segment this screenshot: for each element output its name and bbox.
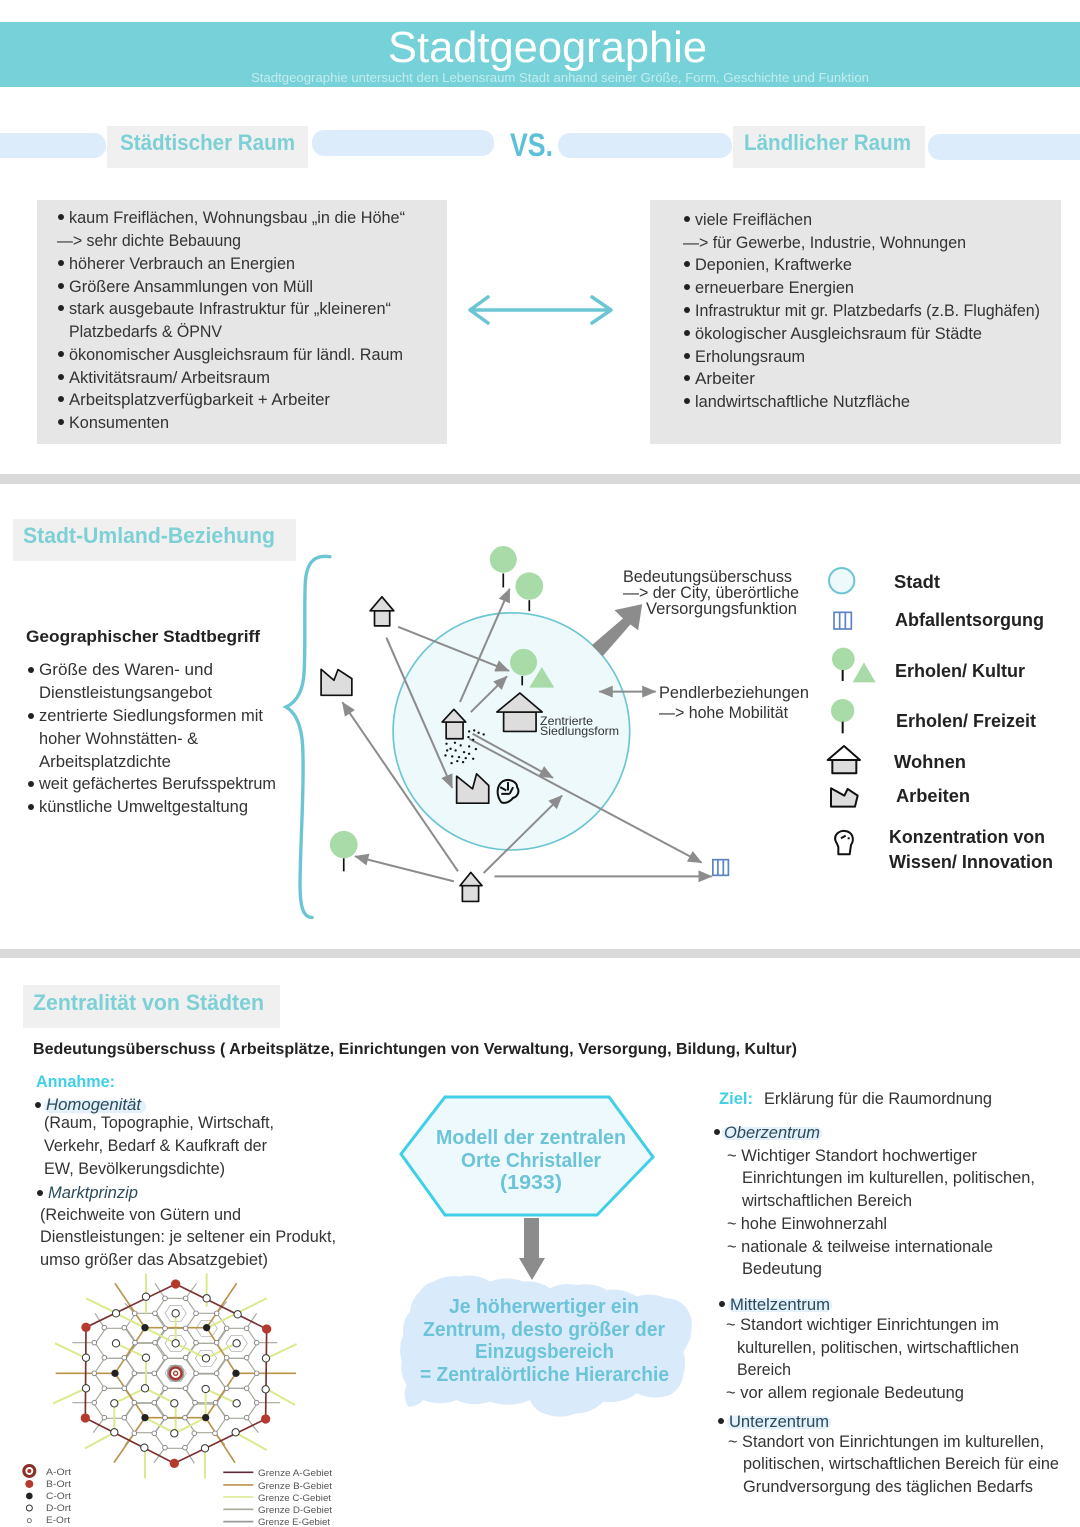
icon: tree lower left bbox=[330, 831, 358, 871]
text block: Geographischer Stadtbegriff: Arbeitsplatzdichte bbox=[39, 753, 171, 771]
heading: Ländlicher Raum: Ländlicher Raum bbox=[744, 130, 911, 155]
cloud: Zentralörtliche Hierarchie: Zentrum, desto größer der bbox=[423, 1319, 665, 1341]
legend: Erholen/ Kultur bbox=[895, 661, 1025, 681]
text block: Oberzentrum: Bedeutung bbox=[742, 1260, 822, 1278]
panel: städtischer Raum: Konsumenten bbox=[69, 414, 169, 432]
text block: Mittelzentrum bbox=[719, 1296, 1019, 1402]
text block: Geographischer Stadtbegriff: künstliche Umweltgestaltung bbox=[39, 798, 248, 816]
heading: Stadt-Umland-Beziehung: Stadt-Umland-Beziehung bbox=[23, 523, 275, 548]
subheading: Bedeutungsüberschuss: Bedeutungsüberschuss ( Arbeitsplätze, Einrichtungen von Verwaltung, Versorgung, Bildung, Kultur) bbox=[33, 1041, 797, 1058]
text block: Unterzentrum: ~ Standort von Einrichtungen im kulturellen, bbox=[728, 1433, 1044, 1451]
text block: Oberzentrum: ~ hohe Einwohnerzahl bbox=[727, 1215, 887, 1233]
legend labels: A-Ort bbox=[46, 1467, 71, 1478]
legend symbols: places bbox=[22, 1464, 36, 1523]
icon: house centre bbox=[442, 709, 466, 739]
legend: Abfallentsorgung bbox=[895, 610, 1044, 630]
text block: Mittelzentrum: Mittelzentrum bbox=[730, 1296, 830, 1314]
panel: städtischer Raum bbox=[37, 200, 447, 444]
hexagon: Modell der zentralen Orte: Orte Christaller bbox=[461, 1150, 601, 1172]
A-area boundary bbox=[85, 1284, 267, 1463]
panel: ländlicher Raum: erneuerbare Energien bbox=[695, 279, 854, 297]
panel: ländlicher Raum: Arbeiter bbox=[695, 370, 756, 388]
legend labels: E-Ort bbox=[46, 1515, 70, 1526]
panel: ländlicher Raum bbox=[650, 200, 1061, 444]
heading: Städtischer Raum bbox=[107, 126, 308, 168]
text block: Geographischer Stadtbegriff: Größe des Waren- und bbox=[39, 661, 213, 679]
legend symbols: borders bbox=[223, 1472, 253, 1522]
legend labels bbox=[46, 1467, 332, 1527]
B places bbox=[81, 1279, 271, 1468]
label: Bedeutungsüberschuss: Bedeutungsüberschuss bbox=[623, 568, 792, 586]
label: Zentrierte Siedlungsform bbox=[540, 714, 619, 738]
text block: Geographischer Stadtbegriff bbox=[26, 627, 276, 816]
text block: Geographischer Stadtbegriff: hoher Wohnstätten- & bbox=[39, 730, 198, 748]
text block: Mittelzentrum: ~ Standort wichtiger Einrichtungen im bbox=[726, 1316, 999, 1334]
text block: Oberzentrum: wirtschaftlichen Bereich bbox=[741, 1192, 912, 1210]
text block: Unterzentrum bbox=[718, 1413, 1059, 1496]
legend: Arbeiten bbox=[896, 786, 970, 806]
title: Stadtgeographie bbox=[388, 23, 707, 72]
panel: städtischer Raum: Platzbedarfs & ÖPNV bbox=[69, 323, 222, 341]
legend bbox=[828, 568, 1053, 872]
panel: städtischer Raum: höherer Verbrauch an Energien bbox=[69, 255, 295, 273]
legend labels: Grenze D-Gebiet bbox=[258, 1505, 332, 1516]
icon: factory left bbox=[321, 669, 352, 695]
cloud: Zentralörtliche Hierarchie bbox=[400, 1276, 692, 1417]
heading: Stadt-Umland-Beziehung bbox=[13, 519, 296, 561]
text block: Annahme: Dienstleistungen: je seltener ein Produkt, bbox=[40, 1228, 336, 1246]
panel: ländlicher Raum: Infrastruktur mit gr. Platzbedarfs (z.B. Flughäfen) bbox=[695, 302, 1040, 320]
hexagon: Modell der zentralen Orte: (1933) bbox=[500, 1172, 562, 1194]
text block: Oberzentrum: Oberzentrum bbox=[724, 1124, 820, 1142]
icon: factory in city bbox=[457, 774, 489, 803]
arrow: Bedeutungsüberschuss bbox=[592, 604, 642, 656]
icon: tree and triangle in city bbox=[510, 649, 554, 688]
header banner bbox=[0, 22, 1080, 87]
label: Pendlerbeziehungen: —> hohe Mobilität bbox=[659, 704, 788, 722]
D places bbox=[82, 1293, 270, 1452]
icon: house top left bbox=[370, 597, 394, 626]
legend: Erholen/ Freizeit bbox=[896, 711, 1036, 731]
city circle bbox=[393, 613, 630, 850]
A place bbox=[167, 1365, 184, 1382]
legend labels: C-Ort bbox=[46, 1491, 71, 1502]
label: Bedeutungsüberschuss: —> der City, überörtliche bbox=[623, 584, 799, 602]
label: Pendlerbeziehungen: Pendlerbeziehungen bbox=[659, 684, 809, 702]
text block: Ziel: Ziel: bbox=[719, 1090, 753, 1108]
text block: Annahme: umso größer das Absatzgebiet) bbox=[40, 1251, 268, 1269]
arrow: down bbox=[519, 1218, 545, 1280]
legend labels: B-Ort bbox=[46, 1479, 71, 1490]
icon: Stadt bbox=[829, 568, 854, 593]
legend: Wissen/ Innovation bbox=[889, 852, 1053, 872]
legend labels: Grenze A-Gebiet bbox=[258, 1468, 332, 1479]
icon: brain bbox=[498, 780, 518, 803]
text block: Annahme: EW, Bevölkerungsdichte) bbox=[44, 1160, 225, 1178]
arrows bbox=[342, 589, 712, 881]
legend: Stadt bbox=[894, 572, 940, 592]
text block: Annahme: Annahme: bbox=[36, 1073, 115, 1091]
text block: Annahme: Verkehr, Bedarf & Kaufkraft der bbox=[44, 1137, 267, 1155]
trees top bbox=[490, 546, 543, 611]
panel: ländlicher Raum: ökologischer Ausgleichsraum für Städte bbox=[695, 325, 982, 343]
text block: Annahme: Homogenität bbox=[46, 1096, 142, 1114]
C places bbox=[111, 1324, 240, 1421]
text block: Oberzentrum: ~ nationale & teilweise internationale bbox=[727, 1238, 993, 1256]
icon: Erholen Freizeit bbox=[831, 699, 854, 733]
label: Zentrierte Siedlungsform: Siedlungsform bbox=[540, 724, 619, 738]
honeycomb grid bbox=[72, 1283, 280, 1463]
heading: Zentralität von Städten: Zentralität von Städten bbox=[33, 990, 264, 1015]
text block: Annahme: (Reichweite von Gütern und bbox=[40, 1206, 241, 1224]
B-area boundaries bbox=[56, 1283, 296, 1463]
heading: Städtischer Raum: Städtischer Raum bbox=[120, 130, 295, 155]
heading: Ländlicher Raum bbox=[733, 126, 925, 168]
icon: house bottom bbox=[460, 872, 482, 901]
legend labels: D-Ort bbox=[46, 1503, 71, 1514]
legend labels: Grenze C-Gebiet bbox=[258, 1493, 331, 1504]
icon: waste bin bbox=[713, 860, 728, 875]
dots: settlement density bbox=[444, 729, 485, 764]
text block: Unterzentrum: Grundversorgung des täglichen Bedarfs bbox=[743, 1478, 1033, 1496]
legend: Konzentration von bbox=[889, 827, 1045, 847]
legend labels: Grenze B-Gebiet bbox=[258, 1481, 332, 1492]
panel: städtischer Raum: Arbeitsplatzverfügbarkeit + Arbeiter bbox=[69, 391, 331, 409]
panel: ländlicher Raum: —> für Gewerbe, Industrie, Wohnungen bbox=[683, 234, 966, 252]
icon: Wohnen bbox=[828, 746, 860, 773]
text block: Mittelzentrum: kulturellen, politischen, wirtschaftlichen bbox=[737, 1339, 1019, 1357]
label: Bedeutungsüberschuss: Versorgungsfunktion bbox=[646, 600, 797, 618]
text block: Oberzentrum: Einrichtungen im kulturellen, politischen, bbox=[742, 1169, 1035, 1187]
text block: Geographischer Stadtbegriff: Geographischer Stadtbegriff bbox=[26, 627, 260, 646]
text block: Annahme: Marktprinzip bbox=[48, 1184, 138, 1202]
panel: ländlicher Raum: landwirtschaftliche Nutzfläche bbox=[695, 393, 910, 411]
panel: städtischer Raum: Größere Ansammlungen von Müll bbox=[69, 278, 313, 296]
text block: Unterzentrum: Unterzentrum bbox=[729, 1413, 829, 1431]
diagram: Christaller hexagon model bbox=[22, 1273, 332, 1527]
label: Zentrierte Siedlungsform: Zentrierte bbox=[540, 714, 593, 728]
text block: Annahme bbox=[35, 1073, 336, 1269]
subtitle: Stadtgeographie untersucht den Lebensraum Stadt anhand seiner Größe, Form, Geschichte und Funktion bbox=[251, 70, 869, 85]
text block: Mittelzentrum: ~ vor allem regionale Bedeutung bbox=[726, 1384, 964, 1402]
text block: Oberzentrum: ~ Wichtiger Standort hochwertiger bbox=[727, 1147, 977, 1165]
text block: Unterzentrum: politischen, wirtschaftlichen Bereich für eine bbox=[743, 1455, 1059, 1473]
cloud: Zentralörtliche Hierarchie: = Zentralörtliche Hierarchie bbox=[420, 1364, 669, 1386]
text block: Ziel: Erklärung für die Raumordnung bbox=[764, 1090, 992, 1108]
text block: Mittelzentrum: Bereich bbox=[737, 1361, 791, 1379]
panel: städtischer Raum: Aktivitätsraum/ Arbeitsraum bbox=[69, 369, 270, 387]
brace bbox=[286, 556, 330, 917]
legend: Wohnen bbox=[894, 752, 966, 772]
label: Pendlerbeziehungen bbox=[659, 684, 809, 722]
heading: Zentralität von Städten bbox=[23, 985, 280, 1028]
heading: VS.: VS. bbox=[510, 127, 553, 163]
text block: Oberzentrum bbox=[714, 1124, 1035, 1278]
C-area boundaries bbox=[53, 1273, 297, 1478]
icon: Abfallentsorgung bbox=[834, 612, 851, 629]
cloud: Zentralörtliche Hierarchie: Einzugsbereich bbox=[475, 1341, 614, 1363]
panel: städtischer Raum: stark ausgebaute Infrastruktur für „kleineren“ bbox=[69, 300, 391, 318]
panel: städtischer Raum: —> sehr dichte Bebauung bbox=[57, 232, 241, 250]
icon: large house bbox=[497, 693, 542, 731]
icon: Erholen Kultur bbox=[832, 648, 876, 682]
diagram: Stadt-Umland relations bbox=[286, 546, 809, 917]
cloud: Zentralörtliche Hierarchie: Je höherwertiger ein bbox=[449, 1296, 639, 1318]
icon: Arbeiten bbox=[831, 788, 858, 807]
text block: Annahme: (Raum, Topographie, Wirtschaft, bbox=[44, 1114, 274, 1132]
panel: städtischer Raum: kaum Freiflächen, Wohnungsbau „in die Höhe“ bbox=[69, 209, 405, 227]
arrow: double-headed comparison bbox=[470, 297, 611, 323]
E places bbox=[92, 1296, 259, 1450]
label: Bedeutungsüberschuss bbox=[623, 568, 799, 618]
text block: Geographischer Stadtbegriff: Dienstleistungsangebot bbox=[39, 684, 212, 702]
text block: Geographischer Stadtbegriff: weit gefächertes Berufsspektrum bbox=[38, 775, 276, 793]
panel: ländlicher Raum: viele Freiflächen bbox=[695, 211, 812, 229]
hexagon: Modell der zentralen Orte bbox=[401, 1097, 653, 1215]
panel: ländlicher Raum: Erholungsraum bbox=[695, 348, 805, 366]
panel: städtischer Raum: ökonomischer Ausgleichsraum für ländl. Raum bbox=[69, 346, 403, 364]
panel: ländlicher Raum: Deponien, Kraftwerke bbox=[695, 256, 852, 274]
text block: Geographischer Stadtbegriff: zentrierte Siedlungsformen mit bbox=[39, 707, 263, 725]
icon: Wissen bbox=[835, 831, 853, 854]
comparison heading row bbox=[0, 126, 1080, 168]
hexagon: Modell der zentralen Orte: Modell der zentralen bbox=[436, 1127, 626, 1149]
